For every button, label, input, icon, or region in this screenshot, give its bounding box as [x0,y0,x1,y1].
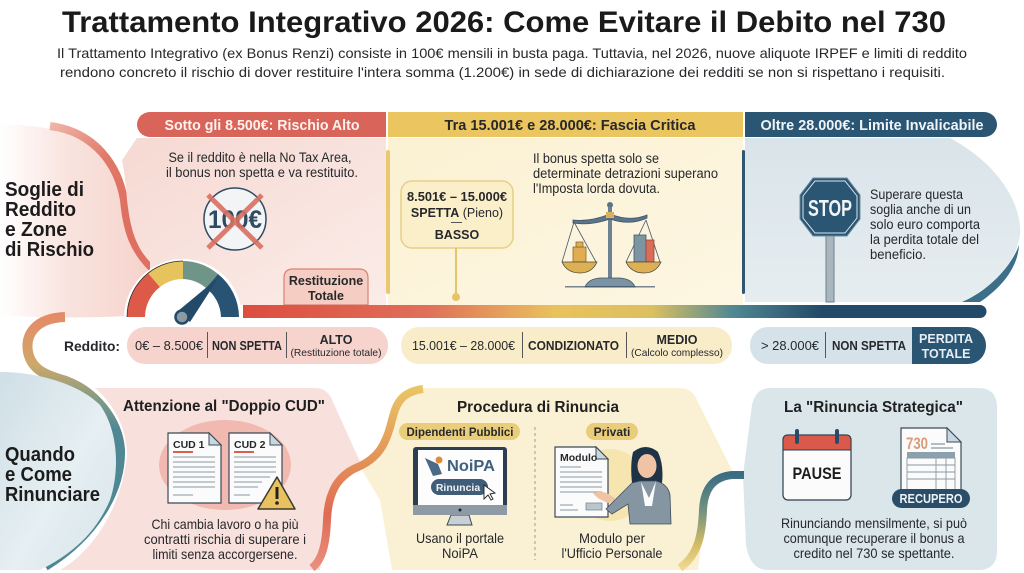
intro text [57,45,967,80]
divider: blue [742,150,745,294]
pill: blue summary: TOTALE [922,347,970,361]
text: cambia lavoro: contratti rischia di superare i [144,531,306,547]
pill: red summary: ALTO [320,333,353,347]
text: usano il portale [416,530,504,561]
pill: blue summary [750,327,986,364]
pill: blue summary: PERDITA [919,332,973,346]
heading: quando e come [5,444,100,506]
icon: two CUD documents with warning: CUD 2 [234,439,266,451]
text: no tax area: Se il reddito è nella No Tax Area, [168,150,352,165]
pill: blue summary: > 28.000€ [761,339,819,353]
text: cambia lavoro [144,516,306,562]
icon: 730 form with recupero badge: RECUPERO [900,492,963,506]
callout: spetta pieno [401,181,513,301]
header: fascia critica [388,112,743,137]
pill: yellow summary: 15.001€ – 28.000€ [412,339,515,353]
header: limite invalicabile [745,112,997,137]
pill: blue summary: NON SPETTA [832,339,906,353]
text: rinunciando mensilmente: Rinunciando mensilmente, si può [781,515,967,531]
icon: stop sign [800,178,860,302]
icon: stop sign: STOP [808,195,852,221]
icon: 730 form with recupero badge: 730 [906,434,928,453]
text: superare soglia [870,187,980,262]
panel: red zone [122,112,386,305]
text: rinunciando mensilmente [781,515,967,561]
pill: yellow summary: (Calcolo complesso) [631,347,723,359]
heading: soglie di reddito: Reddito [5,199,76,221]
icon: crossed 100 euro coin: 100€ [208,206,262,234]
connector: yellow to blue [680,475,744,568]
badge: privati: Privati [594,425,630,439]
intro text: rendono concreto il rischio di dover restituire l'intera somma (1.200€) in sede di dichiarazione dei redditi se non si rispettano i requisiti. [60,64,945,80]
pill: red summary: 0€ – 8.500€ [135,339,203,353]
heading: soglie di reddito: e Zone [5,219,67,241]
header: sotto gli 8500 [137,112,386,137]
panel: rinuncia strategica [743,388,997,570]
heading: soglie di reddito: di Rischio [5,239,94,261]
icon: NoiPA monitor: NoiPA [447,458,495,475]
connector: red to yellow [312,389,423,568]
section circle: soglie [0,125,152,317]
tag: restituzione totale: Restituzione [289,274,363,288]
text: modulo per ufficio [562,530,663,561]
pill: yellow summary [401,327,732,364]
icon: two CUD documents with warning [159,420,295,510]
tag: restituzione totale: Totale [308,289,344,303]
text: superare soglia: soglia anche di un [870,202,971,217]
pill: red summary [127,327,388,364]
arc: red section edge [50,126,152,268]
text: cambia lavoro: Chi cambia lavoro o ha più [152,516,298,532]
heading: procedura: Procedura di Rinuncia [457,399,619,416]
panel: yellow zone [386,112,743,305]
icon: modulo and woman [555,447,671,524]
text: rinunciando mensilmente: comunque recuperare il bonus a [784,530,965,546]
gauge [124,259,242,324]
icon: pause calendar: PAUSE [792,464,842,483]
icon: pause calendar [783,429,851,500]
header: sotto gli 8500: Sotto gli 8.500€: Rischio Alto [164,117,360,134]
text: detrazioni: Il bonus spetta solo se [533,151,659,166]
text: superare soglia: la perdita totale del [870,232,979,247]
heading: quando e come: Rinunciare [5,484,100,506]
section circle: quando e come rinunciare [0,372,116,570]
badge: privati [586,423,638,440]
heading: quando e come: Quando [5,444,75,466]
text: detrazioni: l'Imposta lorda dovuta. [533,181,660,196]
header: limite invalicabile: Oltre 28.000€: Limite Invalicabile [760,117,984,134]
text: superare soglia: solo euro comporta [870,217,980,232]
heading: soglie di reddito: Soglie di [5,179,84,201]
heading: rinuncia strategica: La "Rinuncia Strategica" [784,399,963,416]
callout: spetta pieno: BASSO [435,228,480,242]
badge: dipendenti pubblici: Dipendenti Pubblici [406,425,514,439]
timeline bar [243,305,987,318]
pill: red summary: (Restituzione totale) [290,347,382,359]
text: usano il portale: Usano il portale [416,530,504,546]
divider: yellow [386,150,390,294]
heading: soglie di reddito [5,179,94,261]
text: superare soglia: beneficio. [870,247,926,262]
panel: procedura di rinuncia [362,388,732,570]
callout: spetta pieno: 8.501€ – 15.000€ [407,190,507,204]
text: no tax area: il bonus non spetta e va restituito. [166,165,358,180]
panel: doppio CUD [60,388,362,570]
blue swoosh edge [962,245,1019,302]
title: Trattamento Integrativo 2026: Come Evitare il Debito nel 730 [62,6,946,39]
text: no tax area [166,150,358,180]
icon: NoiPA monitor [413,447,507,525]
icon: scales [562,202,661,288]
pill: yellow summary: MEDIO [657,333,698,347]
summary row label: Reddito: [64,338,120,354]
text: modulo per ufficio: Modulo per [579,530,645,546]
tag: restituzione totale [284,269,368,305]
text: modulo per ufficio: l'Ufficio Personale [562,545,663,561]
intro text: Il Trattamento Integrativo (ex Bonus Renzi) consiste in 100€ mensili in busta paga. Tuttavia, nel 2026, nuove aliquote IRPEF e limiti di reddito [57,45,967,61]
heading: quando e come: e Come [5,464,72,486]
text: detrazioni [533,151,718,196]
icon: 730 form with recupero badge [892,428,970,508]
pill: yellow summary: CONDIZIONATO [528,339,619,353]
connector: upper to lower [27,317,120,566]
text: usano il portale: NoiPA [442,545,479,561]
header: fascia critica: Tra 15.001€ e 28.000€: Fascia Critica [444,117,696,134]
text: rinunciando mensilmente: credito nel 730 se spettante. [794,545,954,561]
text: superare soglia: Superare questa [870,187,963,202]
icon: modulo and woman: Modulo [560,452,597,464]
icon: crossed 100 euro coin [204,188,266,250]
callout: spetta pieno: SPETTA (Pieno) [411,206,503,220]
icon: two CUD documents with warning: CUD 1 [173,439,205,451]
icon: NoiPA monitor: Rinuncia [436,482,480,494]
gauge needle [176,277,219,324]
heading: doppio CUD: Attenzione al "Doppio CUD" [123,398,325,415]
text: cambia lavoro: limiti senza accorgersene. [152,546,298,562]
panel: blue zone [742,112,1020,302]
pill: red summary: NON SPETTA [212,339,282,353]
text: detrazioni: determinate detrazioni superano [533,166,718,181]
